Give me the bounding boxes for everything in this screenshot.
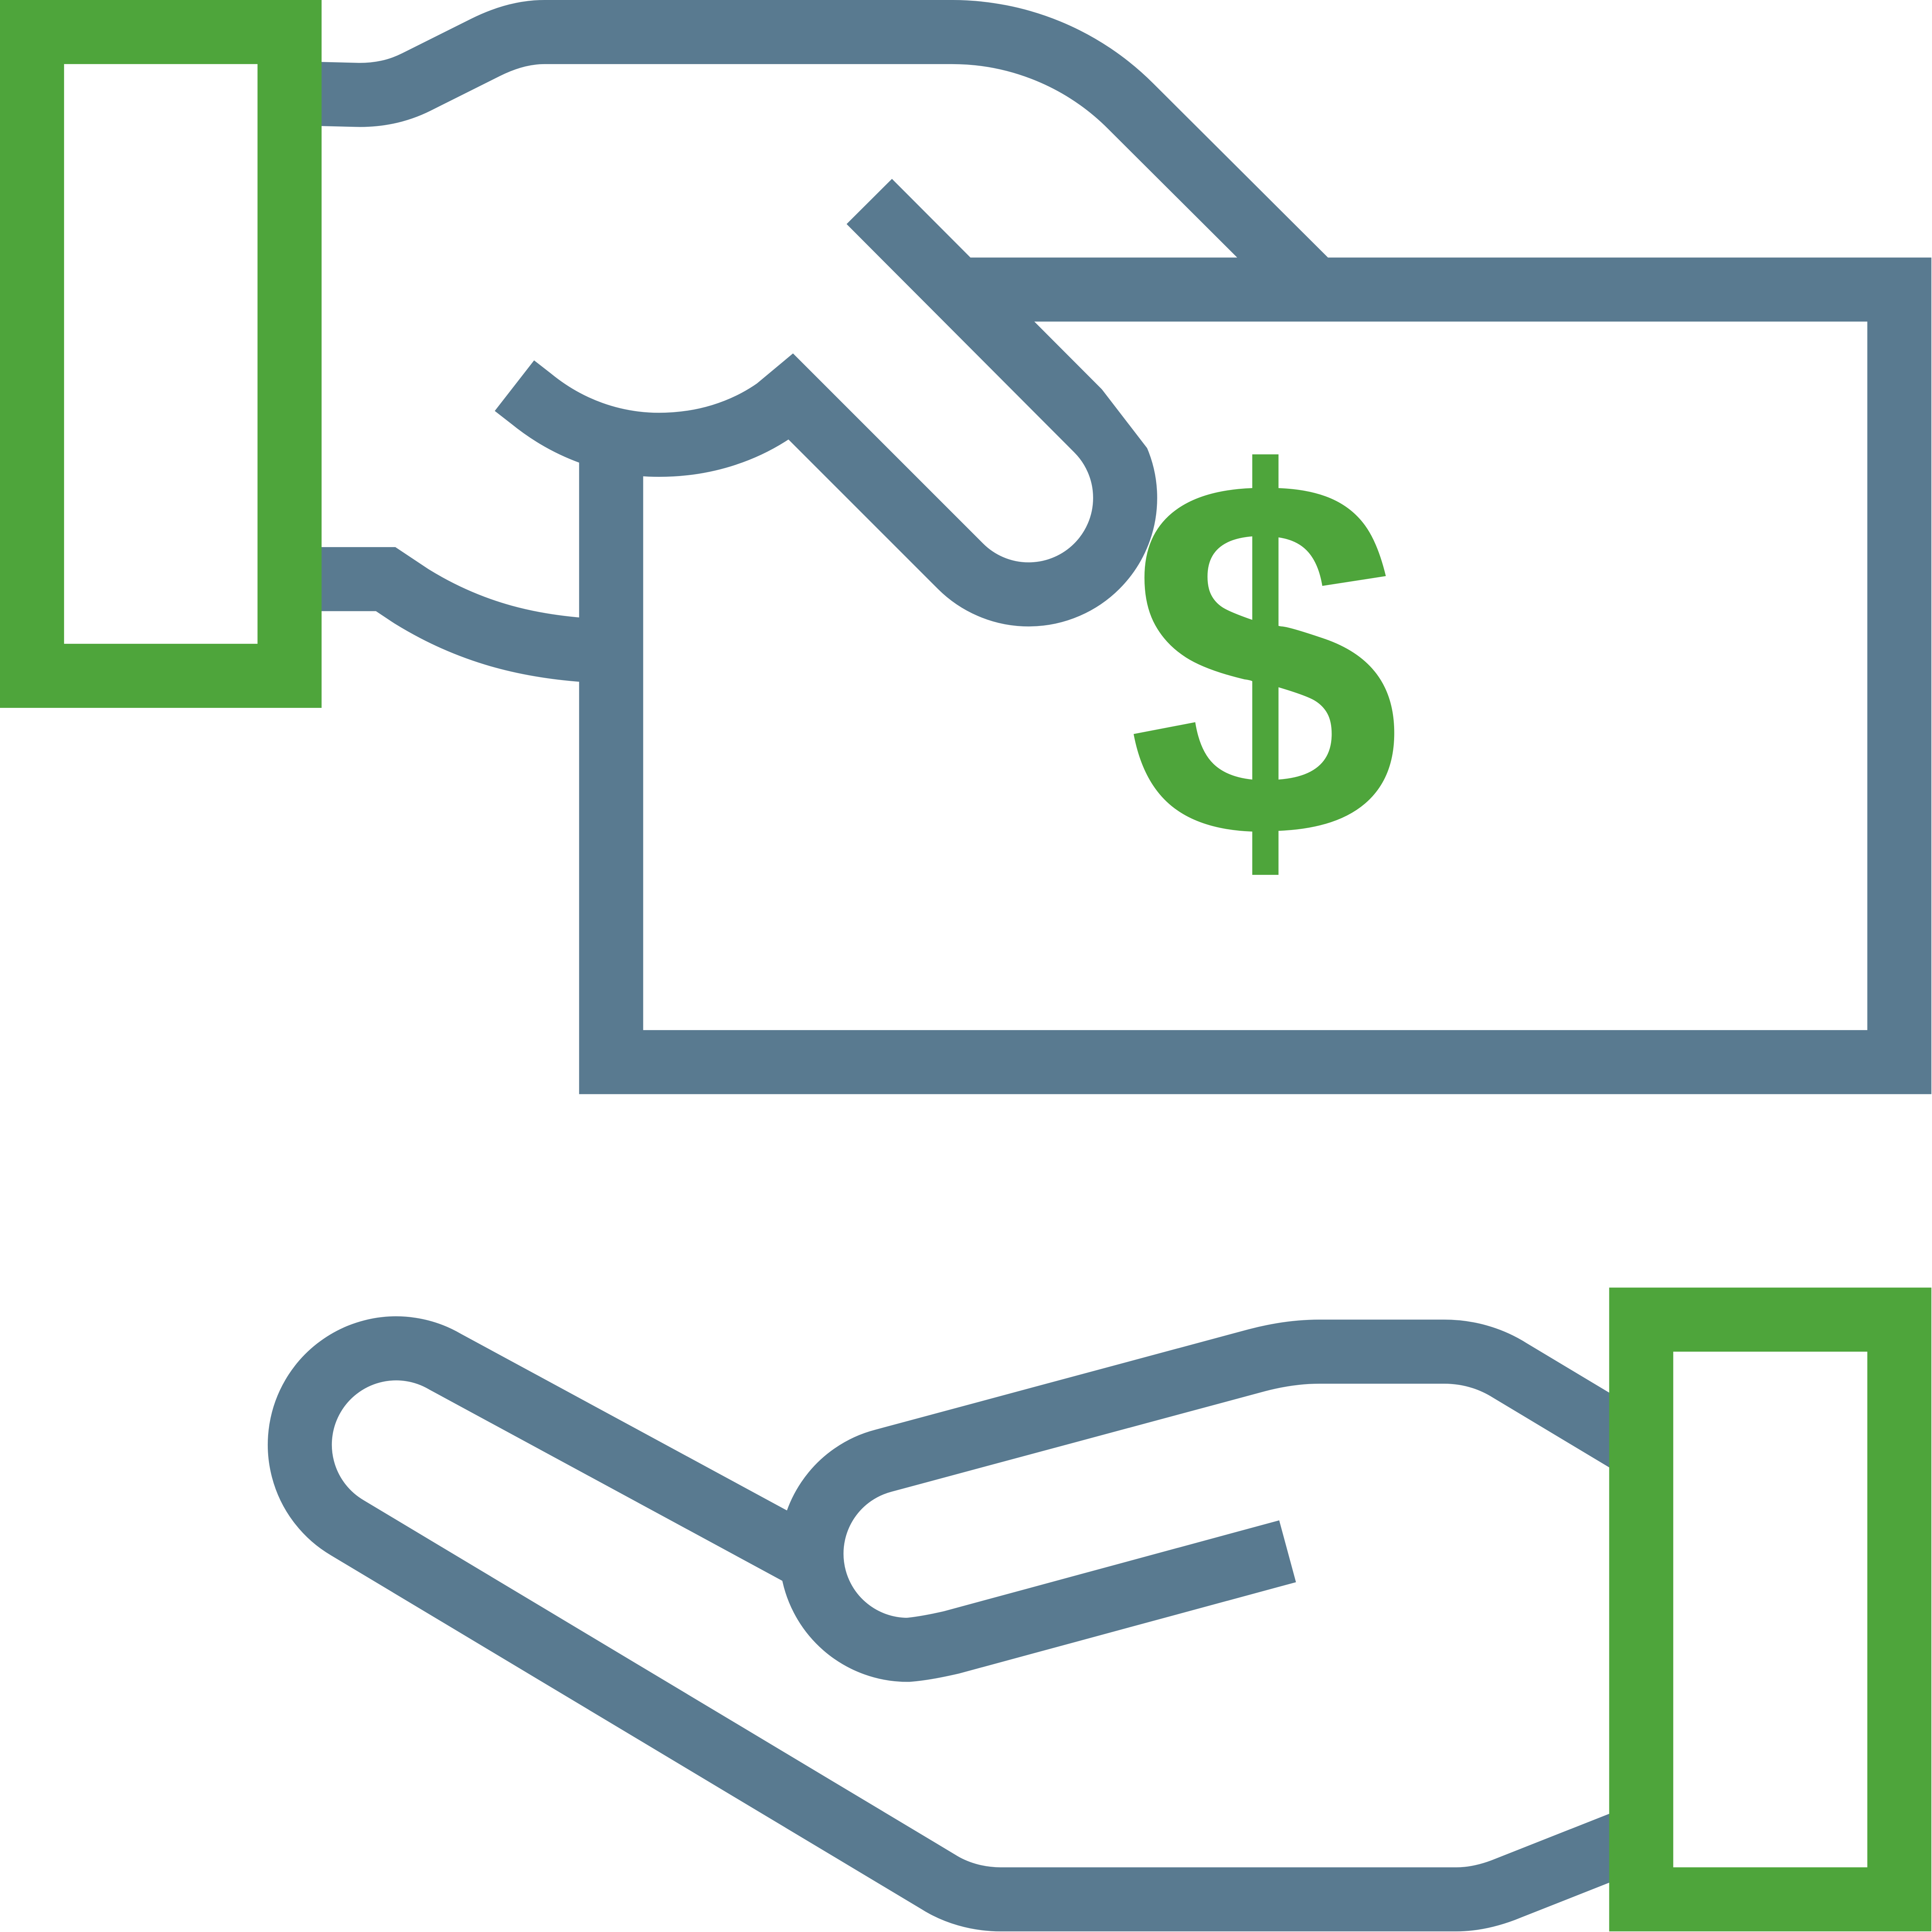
white clean-up of finger knuckle corners: [1099, 376, 1166, 606]
lower edge of upper hand: [308, 579, 611, 651]
back of upper hand: [308, 32, 1315, 289]
icon: lower hand: [300, 1349, 1626, 1899]
thumb and upper palm: [811, 1352, 1626, 1650]
index finger and palm crease: [514, 201, 1125, 594]
icon: lower sleeve cuff: [1641, 1320, 1899, 1899]
icon: dollar sign: $: [1127, 371, 1401, 946]
fingers and lower palm: [300, 1349, 1626, 1899]
icon: upper sleeve cuff: [32, 32, 289, 676]
icon: upper hand: [308, 32, 1315, 651]
icon: banknote: [611, 289, 1899, 1062]
